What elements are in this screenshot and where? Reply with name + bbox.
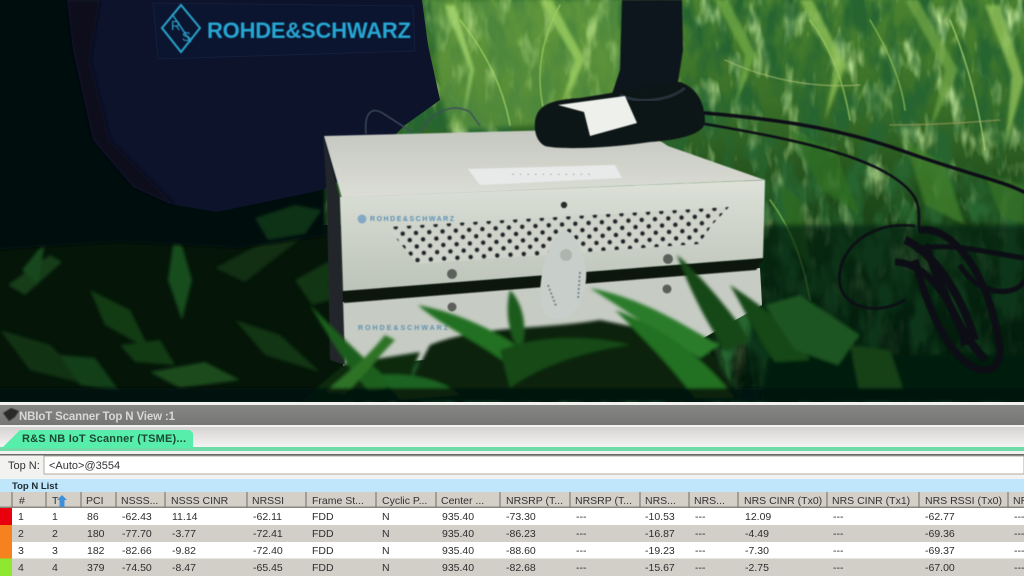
row 1 values: ---	[695, 511, 706, 523]
table rows	[0, 508, 1024, 576]
row 4 values	[18, 562, 1024, 574]
row 1 values: FDD	[312, 511, 334, 523]
lower unit screw right	[662, 284, 672, 294]
logo diamond R and S: S	[182, 29, 191, 44]
logo diamond R and S: R	[171, 18, 180, 33]
coiled cable	[840, 225, 1024, 370]
row 3 values: FDD	[312, 545, 334, 557]
input box	[44, 456, 1024, 474]
lower unit logo strip: ROHDE&SCHWARZ	[358, 325, 449, 332]
header labels: NSSS...	[121, 495, 158, 507]
tab strip	[0, 427, 1024, 456]
row 2 values: 2	[18, 528, 24, 540]
row 4 values: -2.75	[745, 562, 769, 574]
row 4 values: 379	[87, 562, 105, 574]
header labels: T	[52, 495, 59, 507]
bag fold shading	[67, 0, 175, 205]
row 1 values: 11.14	[172, 511, 198, 523]
panel background	[0, 402, 1024, 576]
row 4 values: 4	[52, 562, 58, 574]
base highlight	[620, 88, 685, 100]
row 3 signal colour	[0, 542, 12, 558]
row 3 values: -88.60	[506, 545, 536, 557]
front screw right	[663, 254, 673, 264]
row 3 values: -9.82	[172, 545, 196, 557]
bag and dark left shadow	[0, 0, 440, 250]
header bottom rule	[0, 506, 1024, 508]
row 4 values: N	[382, 562, 390, 574]
row 1 values: ---	[833, 511, 844, 523]
small leaves under bag	[255, 205, 322, 240]
window title: NBIoT Scanner Top N View :1	[19, 411, 176, 423]
front screw left	[447, 269, 457, 279]
row 2 values: N	[382, 528, 390, 540]
row 4 values: -65.45	[253, 562, 283, 574]
list bar fill	[0, 479, 1024, 492]
white connector clip	[540, 230, 586, 319]
column separators	[12, 492, 1008, 507]
row 1 values: 1	[52, 511, 58, 523]
header labels: #	[19, 495, 25, 507]
row 4 values: -82.68	[506, 562, 536, 574]
row 4 values: FDD	[312, 562, 334, 574]
header labels: NRSSI	[252, 495, 284, 507]
thin cables behind the scanner	[366, 108, 480, 134]
title bar icon	[3, 408, 19, 421]
dark rule under tab line	[0, 454, 1024, 456]
row 3 values: -82.66	[122, 545, 152, 557]
row 1 background	[0, 508, 1024, 525]
header labels: Cyclic P...	[382, 495, 427, 507]
row 4 values: ---	[695, 562, 706, 574]
row 3 background	[0, 542, 1024, 558]
header labels: NRS CINR (Tx1)	[832, 495, 910, 507]
row 1 values: -62.43	[122, 511, 152, 523]
row 4 values: -15.67	[645, 562, 675, 574]
side shadow edge	[323, 135, 345, 365]
front logo: ROHDE&SCHWARZ	[370, 216, 455, 223]
thin light grass stems	[460, 5, 1000, 300]
patch background	[153, 3, 415, 59]
row 3 values	[18, 545, 1024, 557]
row 2 values: -4.49	[745, 528, 769, 540]
row 1 values: 935.40	[442, 511, 474, 523]
grass texture, dark gaps	[0, 0, 1024, 402]
row 3 values: -7.30	[745, 545, 769, 557]
row 2 values: -86.23	[506, 528, 536, 540]
row 2 values: -72.41	[253, 528, 283, 540]
header labels: NRS RSSI (Tx0)	[925, 495, 1002, 507]
row 2 values: -77.70	[122, 528, 152, 540]
header labels: NSSS CINR	[171, 495, 229, 507]
row 3 values: ---	[695, 545, 706, 557]
header labels: NRS...	[694, 495, 725, 507]
header background	[0, 492, 1024, 508]
embroidered logo patch	[153, 3, 415, 59]
Top N List bar	[0, 479, 1024, 492]
scanner software panel	[0, 402, 1024, 576]
input label: Top N:	[8, 460, 40, 472]
row 1 values: 12.09	[745, 511, 771, 523]
row 4 values: ---	[576, 562, 587, 574]
dark gap between units	[343, 258, 764, 303]
row 4 signal colour	[0, 558, 12, 576]
tab strip background	[0, 427, 1024, 447]
row 2 values: 935.40	[442, 528, 474, 540]
lower unit housing	[342, 268, 762, 366]
row 3 values: 3	[52, 545, 58, 557]
row 4 values: ---	[833, 562, 844, 574]
antenna base	[535, 82, 705, 148]
ventilation grille	[387, 207, 729, 264]
white sticker on top face	[468, 165, 622, 185]
green active line	[0, 447, 1024, 451]
list bar label: Top N List	[12, 481, 59, 492]
header labels: Center ...	[441, 495, 484, 507]
row 3 values: -19.23	[645, 545, 675, 557]
header labels: PCI	[86, 495, 104, 507]
active tab	[2, 430, 193, 448]
sticker text: - - - - - - - - - - -	[512, 172, 590, 178]
row 2 values	[18, 528, 1024, 540]
row 2 values: -69.36	[925, 528, 955, 540]
window title bar	[0, 405, 1024, 425]
row 1 values: -62.11	[253, 511, 282, 523]
header labels: NRSRP (T...	[506, 495, 563, 507]
row 2 signal colour	[0, 525, 12, 542]
sort arrow icon	[57, 495, 67, 507]
front logo mark	[358, 214, 366, 224]
title bar fill	[0, 405, 1024, 425]
dark grass, left lower area	[0, 225, 345, 402]
table header	[0, 492, 1024, 508]
header labels	[19, 495, 1024, 507]
header labels: Frame St...	[312, 495, 364, 507]
row 2 values: 2	[52, 528, 58, 540]
row 1 values: -62.77	[925, 511, 955, 523]
foreground grass blades over scanner	[0, 255, 1024, 402]
row 4 values: 4	[18, 562, 24, 574]
row 4 background	[0, 558, 1024, 576]
front screw top	[561, 202, 567, 208]
header labels: NRS...	[645, 495, 676, 507]
row 2 values: FDD	[312, 528, 334, 540]
antenna stem	[610, 0, 700, 100]
header labels: NRSRP (T...	[575, 495, 632, 507]
row 3 values: ---	[576, 545, 587, 557]
row 3 values: -72.40	[253, 545, 283, 557]
antenna cables	[705, 113, 1024, 232]
row 1 values: ---	[576, 511, 587, 523]
row 3 values: 935.40	[442, 545, 474, 557]
left-side grass blades in shadow	[0, 225, 338, 392]
brand name: ROHDE&SCHWARZ	[207, 18, 411, 43]
top face	[324, 128, 765, 198]
row 2 values: 180	[87, 528, 105, 540]
row 1 values: N	[382, 511, 390, 523]
lower scanner unit	[342, 268, 762, 366]
upper scanner unit	[323, 128, 765, 365]
row 1 values: 1	[18, 511, 24, 523]
slim grass blades, upper area	[445, 0, 1024, 270]
row 2 values: ---	[833, 528, 844, 540]
grass background	[0, 0, 1024, 402]
Top N input row	[8, 456, 1024, 474]
row 1 values	[18, 511, 1024, 523]
row 3 values: 182	[87, 545, 105, 557]
GPS antenna	[535, 0, 705, 148]
row 3 values: -69.37	[925, 545, 955, 557]
front face	[340, 180, 765, 291]
row 4 values: -67.00	[925, 562, 955, 574]
header labels: NRS CINR (Tx0)	[744, 495, 822, 507]
row 3 values: ---	[833, 545, 844, 557]
row 3 values: 3	[18, 545, 24, 557]
grass texture, light blades	[324, 0, 1024, 380]
darker grass, right lower area	[740, 225, 1024, 402]
row 4 values: -8.47	[172, 562, 196, 574]
row 4 values: 935.40	[442, 562, 474, 574]
row 1 signal colour	[0, 508, 12, 525]
bright grass patch, top centre	[430, 0, 620, 130]
row 1 values: -73.30	[506, 511, 536, 523]
row 3 values: N	[382, 545, 390, 557]
row 2 values: ---	[695, 528, 706, 540]
input value: <Auto>@3554	[49, 460, 120, 472]
row 2 values: -3.77	[172, 528, 196, 540]
logo diamond R and S	[162, 5, 200, 52]
photo: scanner on grass	[0, 0, 1024, 402]
row 1 values: -10.53	[645, 511, 675, 523]
row 1 values: 86	[87, 511, 99, 523]
white label on antenna	[558, 96, 637, 136]
row 4 values: -74.50	[122, 562, 152, 574]
navy carrying bag	[67, 0, 440, 212]
row 2 values: ---	[576, 528, 587, 540]
row 2 background	[0, 525, 1024, 542]
lower unit screw	[448, 302, 456, 312]
tab label: R&S NB IoT Scanner (TSME)...	[22, 433, 186, 445]
row 2 values: -16.87	[645, 528, 675, 540]
dark shadow area, left	[0, 0, 325, 250]
